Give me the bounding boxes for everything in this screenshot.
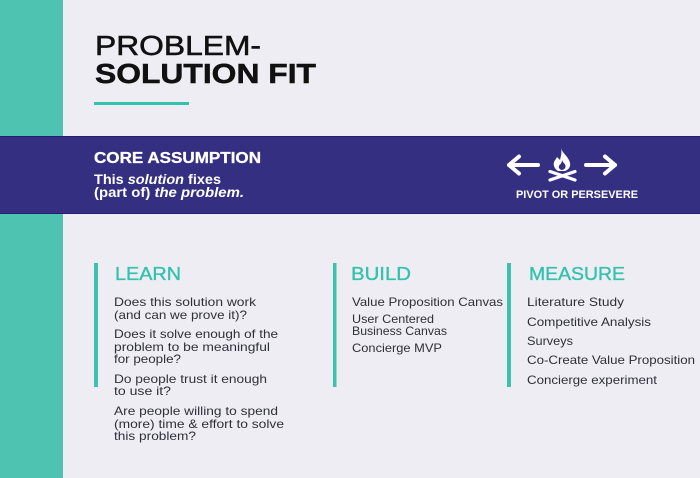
learn questions: for people?	[114, 352, 181, 366]
build list: Business Canvas	[352, 324, 447, 338]
measure list	[527, 295, 695, 387]
build list: Value Proposition Canvas	[352, 295, 503, 309]
panel: learn	[94, 263, 285, 443]
measure list: Surveys	[527, 334, 573, 348]
icon: campfire	[550, 148, 575, 180]
title: SOLUTION FIT	[95, 58, 316, 89]
core assumption text	[94, 150, 261, 200]
icon: right arrow	[586, 156, 615, 174]
core assumption text: CORE ASSUMPTION	[94, 150, 261, 167]
core assumption text: This solution fixes	[94, 172, 221, 187]
learn questions: (and can we prove it)?	[114, 308, 247, 322]
icon: left arrow	[509, 156, 538, 174]
panel: core assumption band	[0, 136, 700, 214]
measure list: Literature Study	[527, 295, 624, 309]
learn questions: Does it solve enough of the	[114, 327, 279, 341]
measure heading: MEASURE	[529, 263, 625, 284]
build list: Concierge MVP	[352, 341, 442, 355]
learn questions: Does this solution work	[114, 295, 256, 309]
build list	[352, 295, 503, 355]
measure list: Concierge experiment	[527, 373, 658, 387]
learn questions: problem to be meaningful	[114, 340, 270, 354]
left teal sidebar	[0, 0, 63, 478]
learn questions: Are people willing to spend	[114, 404, 278, 418]
measure list: Competitive Analysis	[527, 315, 651, 329]
learn questions: to use it?	[114, 384, 172, 398]
learn questions	[114, 295, 285, 443]
title underline	[94, 102, 189, 105]
measure list: Co-Create Value Proposition	[527, 353, 695, 367]
title: PROBLEM-	[95, 30, 261, 61]
learn questions: (more) time & effort to solve	[114, 417, 285, 431]
title	[95, 30, 316, 89]
core assumption text: (part of) the problem.	[94, 185, 244, 200]
learn questions: Do people trust it enough	[114, 372, 267, 386]
learn questions: this problem?	[114, 429, 196, 443]
build heading: BUILD	[351, 263, 411, 284]
pivot or persevere label: PIVOT OR PERSEVERE	[516, 189, 638, 201]
learn heading: LEARN	[115, 263, 181, 284]
build list: User Centered	[352, 312, 434, 326]
panel: build	[333, 263, 503, 387]
panel: measure	[507, 263, 695, 387]
